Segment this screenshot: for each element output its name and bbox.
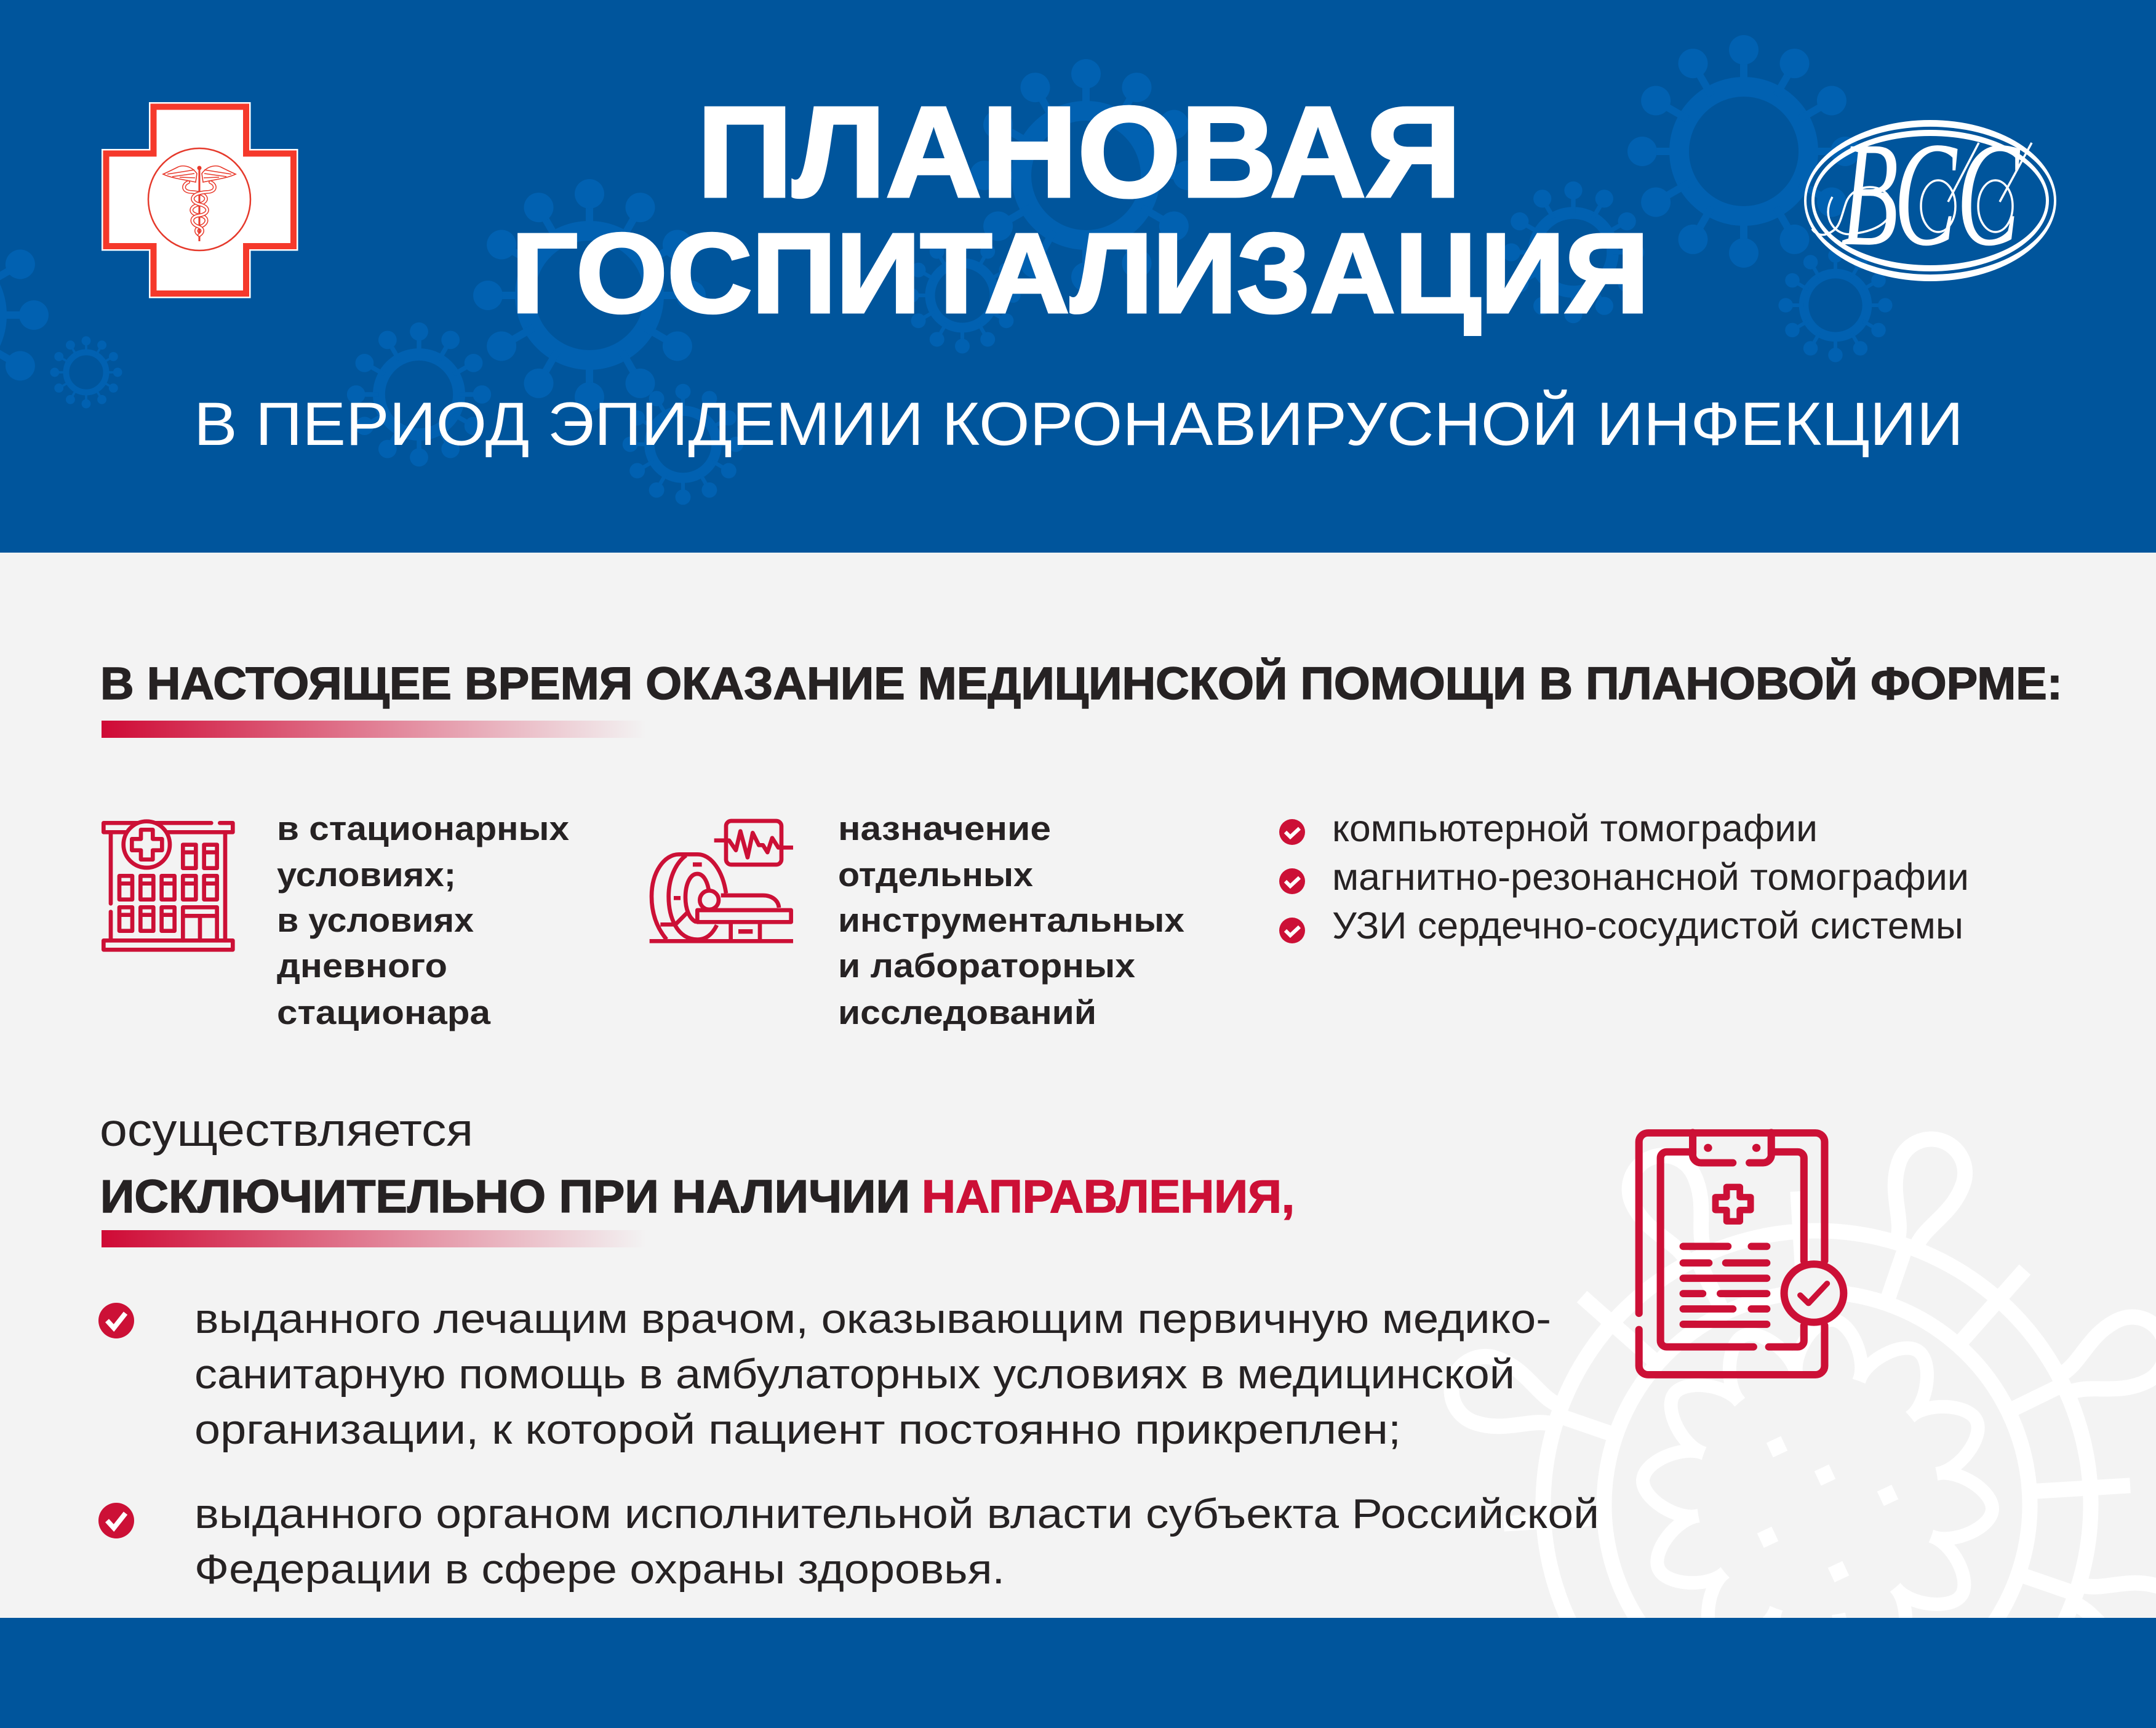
virus pattern background	[0, 35, 1893, 505]
lead-in text: осуществляется	[100, 1104, 473, 1156]
title: ПЛАНОВАЯ	[697, 81, 1461, 224]
text: inpatient conditions: дневного	[277, 946, 447, 985]
text: inpatient conditions: условиях;	[277, 855, 456, 894]
title: ГОСПИТАЛИЗАЦИЯ	[511, 210, 1649, 336]
second heading gradient underline	[102, 1230, 646, 1247]
footer band	[0, 1618, 2156, 1728]
paragraph 1 with check: санитарную помощь в амбулаторных условиях в медицинской	[194, 1351, 1515, 1398]
text: inpatient conditions: в стационарных	[277, 809, 569, 847]
text: inpatient conditions: в условиях	[277, 901, 474, 939]
list item: MRI: магнитно-резонансной томографии	[1332, 856, 1969, 898]
paragraph 1 with check: выданного лечащим врачом, оказывающим первичную медико-	[194, 1295, 1551, 1342]
title	[511, 81, 1649, 336]
text: diagnostics: назначение	[838, 809, 1051, 847]
logo: VSS oval monogram	[1804, 111, 2056, 281]
section heading: В НАСТОЯЩЕЕ ВРЕМЯ ОКАЗАНИЕ МЕДИЦИНСКОЙ ПОМОЩИ В ПЛАНОВОЙ ФОРМЕ:	[100, 657, 2062, 709]
logo: red cross with caduceus	[106, 107, 293, 294]
text: diagnostics	[838, 809, 1184, 1031]
text: diagnostics: исследований	[838, 993, 1096, 1031]
logo: VSS oval monogram: ВСС	[1841, 111, 2021, 277]
icon: clipboard with referral and check	[1639, 1132, 1843, 1375]
text: inpatient conditions: стационара	[277, 993, 490, 1031]
second heading: ИСКЛЮЧИТЕЛЬНО ПРИ НАЛИЧИИ	[100, 1170, 910, 1222]
decorative white virus	[1442, 1130, 2156, 1713]
paragraph 2 with check	[98, 1490, 1599, 1593]
heading gradient underline	[102, 721, 646, 738]
paragraph 2 with check: Федерации в сфере охраны здоровья.	[194, 1546, 1005, 1593]
list item: CT: компьютерной томографии	[1332, 807, 1818, 849]
paragraph 2 with check: выданного органом исполнительной власти субъекта Российской	[194, 1490, 1599, 1537]
text: diagnostics: и лабораторных	[838, 946, 1135, 985]
text: diagnostics: инструментальных	[838, 901, 1184, 939]
icon: MRI scanner with monitor	[650, 821, 793, 941]
checklist: examinations	[1279, 807, 1969, 946]
text: inpatient conditions	[277, 809, 569, 1031]
second heading	[100, 1170, 1295, 1222]
subtitle: В ПЕРИОД ЭПИДЕМИИ КОРОНАВИРУСНОЙ ИНФЕКЦИИ	[194, 390, 1963, 458]
paragraph 1 with check: организации, к которой пациент постоянно прикреплен;	[194, 1406, 1401, 1453]
paragraph 1 with check	[98, 1295, 1551, 1453]
second heading: НАПРАВЛЕНИЯ,	[922, 1170, 1295, 1222]
icon: hospital building	[103, 822, 233, 950]
text: diagnostics: отдельных	[838, 855, 1033, 894]
header band	[0, 0, 2156, 553]
list item: ultrasound: УЗИ сердечно-сосудистой системы	[1332, 905, 1963, 946]
